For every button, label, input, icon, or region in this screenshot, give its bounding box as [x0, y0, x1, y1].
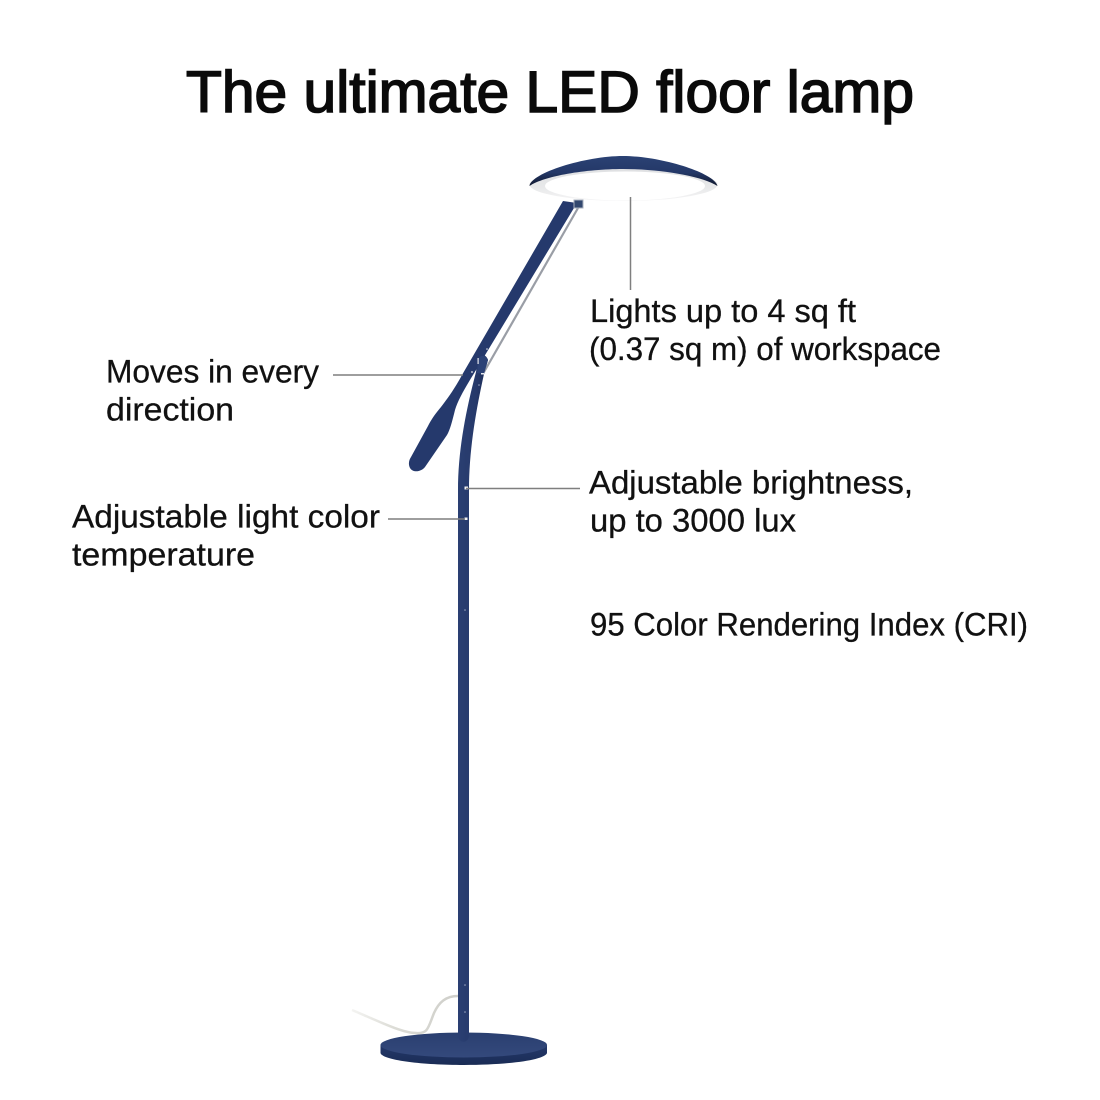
label: workspace coverage	[589, 293, 941, 367]
leader line: workspace	[630, 197, 632, 290]
power cord	[352, 996, 458, 1033]
label: color rendering index: 95 Color Rendering Index (CRI)	[590, 606, 1028, 642]
label: brightness: up to 3000 lux	[590, 502, 796, 538]
arm pivot joint	[477, 356, 488, 374]
label: brightness: Adjustable brightness,	[589, 464, 913, 500]
lamp arm with counterweight paddle	[409, 201, 577, 471]
label: movement: Moves in every	[106, 354, 320, 390]
round base	[380, 1032, 547, 1065]
label: light color temperature	[72, 498, 380, 572]
stem touch points	[464, 384, 480, 1013]
label: workspace coverage: (0.37 sq m) of workspace	[589, 331, 941, 367]
lamp head	[530, 156, 718, 201]
leader line: brightness	[466, 488, 580, 490]
label: movement	[106, 354, 320, 428]
label: workspace coverage: Lights up to 4 sq ft	[590, 293, 856, 329]
stem with curved neck	[458, 355, 488, 1042]
head bracket	[574, 200, 583, 208]
leader line: moves	[333, 374, 463, 376]
support rod	[484, 208, 578, 372]
label: light color temperature: Adjustable light color	[72, 498, 380, 534]
brightness touch marker	[464, 486, 468, 490]
pivot highlights	[471, 348, 488, 374]
color temperature touch marker	[464, 518, 468, 520]
leader line: color temperature	[388, 518, 465, 520]
label: movement: direction	[106, 392, 234, 428]
label: light color temperature: temperature	[72, 536, 255, 572]
title: The ultimate LED floor lamp	[186, 60, 914, 125]
floor lamp illustration	[352, 156, 718, 1065]
label: brightness	[589, 464, 913, 538]
